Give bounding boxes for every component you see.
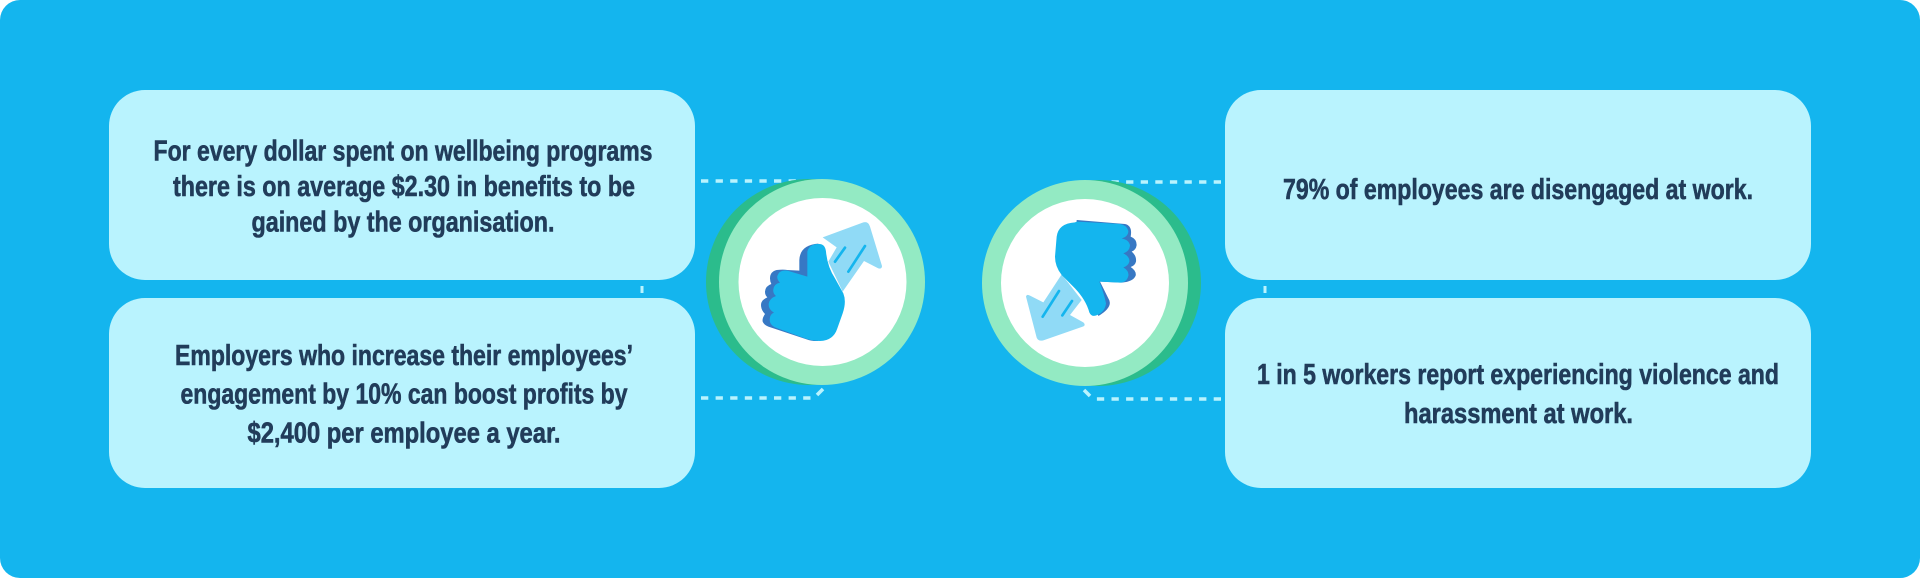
panel: wellbeing programs benefit: For every dollar spent on wellbeing programs bbox=[154, 136, 652, 168]
panel: violence and harassment bbox=[1225, 298, 1811, 488]
panel: employee engagement profits: Employers who increase their employees’ bbox=[175, 340, 633, 372]
panel: wellbeing programs benefit bbox=[109, 90, 695, 280]
panel: employee engagement profits bbox=[109, 298, 695, 488]
panel: wellbeing programs benefit: gained by the organisation. bbox=[252, 206, 554, 238]
dashed connector lines: right bbox=[1084, 182, 1265, 399]
icon: thumbs down with arrow bbox=[982, 180, 1201, 386]
panel: violence and harassment: 1 in 5 workers report experiencing violence and bbox=[1257, 359, 1779, 391]
panel: employee engagement profits: engagement by 10% can boost profits by bbox=[180, 378, 628, 410]
panel: violence and harassment: harassment at work. bbox=[1404, 398, 1633, 430]
panel: wellbeing programs benefit: there is on average $2.30 in benefits to be bbox=[173, 171, 635, 203]
panel: disengaged employees bbox=[1225, 90, 1811, 280]
panel: employee engagement profits: $2,400 per employee a year. bbox=[248, 418, 560, 450]
dashed connector lines: left bbox=[642, 181, 823, 398]
panel: disengaged employees: 79% of employees are disengaged at work. bbox=[1283, 174, 1753, 206]
icon: thumbs up with arrow bbox=[706, 179, 925, 385]
